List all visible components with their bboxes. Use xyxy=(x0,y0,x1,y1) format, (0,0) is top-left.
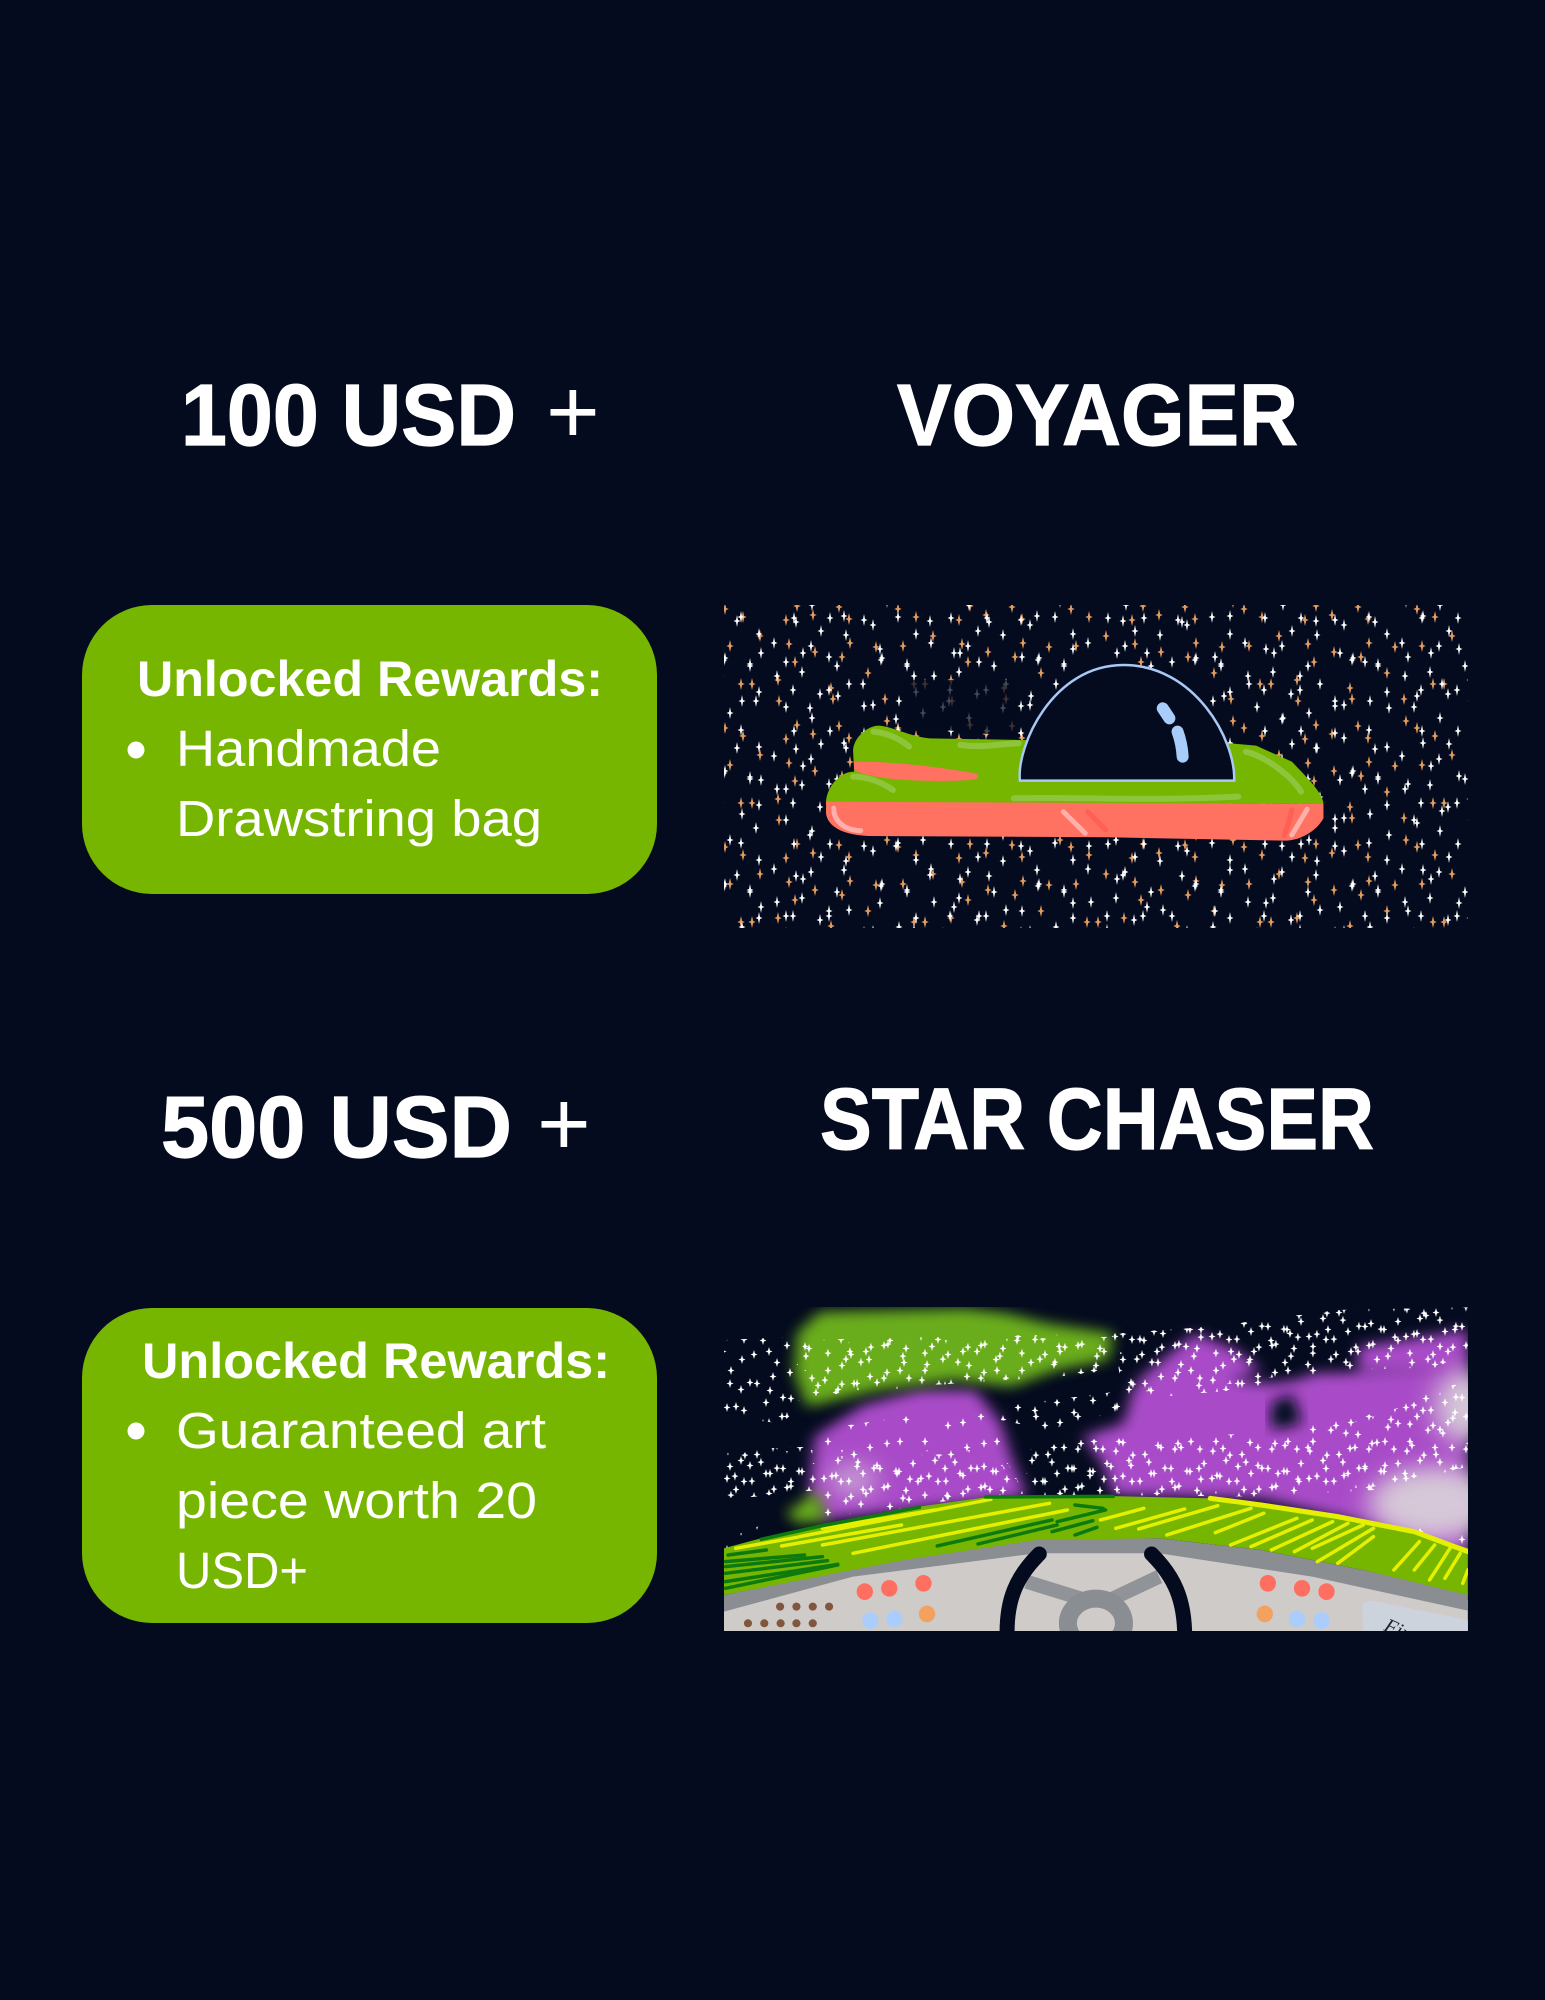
nebula: dark gap xyxy=(1271,1393,1302,1430)
cockpit: grey window frame xyxy=(724,1538,1468,1612)
panel: 100 USD unlocked rewards: Unlocked Rewards: xyxy=(137,651,603,707)
heading: Voyager: VOYAGER xyxy=(897,367,1298,464)
nebula: purple clouds xyxy=(810,1330,1468,1557)
cockpit: yellow and dark green hood strokes xyxy=(726,1496,1468,1588)
illustration: voyager spaceship in starfield xyxy=(724,605,1468,928)
cockpit: green hood xyxy=(724,1496,1468,1595)
heading: 500 USD +: 500 USD xyxy=(161,1079,512,1176)
panel: 500 USD unlocked rewards: Unlocked Rewards: xyxy=(142,1333,610,1389)
panel: 500 USD unlocked rewards: piece worth 20 xyxy=(176,1472,537,1529)
cockpit: note card xyxy=(1362,1601,1468,1633)
panel: 100 USD unlocked rewards: Drawstring bag xyxy=(176,790,542,847)
heading: 100 USD +: 100 USD xyxy=(181,367,516,464)
cockpit: control lights xyxy=(744,1575,1335,1629)
infographic canvas xyxy=(82,384,1468,1631)
nebula: pale haze xyxy=(830,1370,1501,1540)
cockpit: dashboard panel xyxy=(724,1553,1468,1631)
panel: 500 USD unlocked rewards: Guaranteed art xyxy=(176,1402,546,1459)
panel: 500 USD unlocked rewards xyxy=(82,1308,657,1623)
cockpit: steering wheel xyxy=(1007,1554,1185,1648)
illustration: star chaser cockpit view of nebula xyxy=(724,1307,1468,1631)
heading: 500 USD +: + xyxy=(537,1073,591,1175)
stars: dense white star bands xyxy=(724,1307,1468,1550)
panel: 500 USD unlocked rewards: USD+ xyxy=(176,1542,308,1599)
heading: Star Chaser: STAR CHASER xyxy=(820,1071,1374,1168)
panel: 100 USD unlocked rewards xyxy=(82,605,657,894)
nebula: small green wisp xyxy=(787,1490,828,1523)
nebula: green cloud xyxy=(794,1308,1113,1407)
cockpit: handwritten note: Fine l xyxy=(1380,1614,1433,1654)
panel: 100 USD unlocked rewards: Handmade xyxy=(176,720,441,777)
heading: 100 USD +: + xyxy=(546,361,600,463)
